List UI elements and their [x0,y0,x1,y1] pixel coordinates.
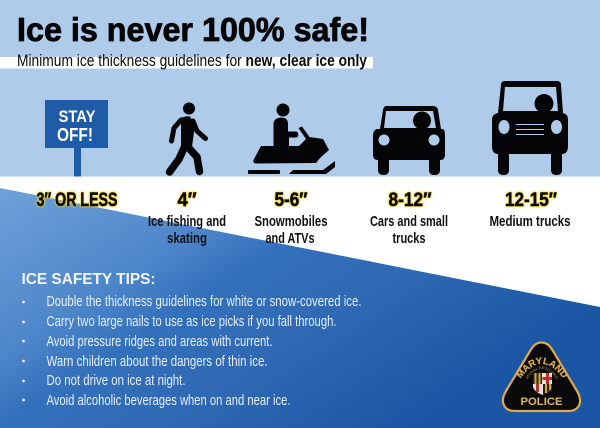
tip 2: Carry two large nails to use as ice picks if you fall through. [46,313,336,330]
tip 5: Do not drive on ice at night. [46,372,186,389]
tip 3: Avoid pressure ridges and areas with current. [46,333,272,350]
description: medium trucks: Medium trucks [490,213,570,230]
icon: stay off sign: STAY [58,108,96,126]
tip 1: Double the thickness guidelines for white or snow-covered ice. [46,293,362,310]
logo: Maryland Police badge: MARYLAND [517,357,566,378]
icon: car [373,106,445,175]
icon: stay off sign [45,100,108,176]
sky background panel [0,0,600,176]
description: cars: trucks [392,230,426,247]
subtitle banner: Minimum ice thickness guidelines for new, clear ice only [17,52,368,70]
thickness label: 5-6 inches: 5-6″ [274,189,308,211]
logo: Maryland Police badge: POLICE [520,396,562,408]
tip 4: Warn children about the dangers of thin ice. [46,353,268,370]
icon: stay off sign: OFF! [57,125,93,145]
description: cars [370,213,448,247]
thickness label: 3 inches or less: 3″ OR LESS [36,189,118,211]
logo: Maryland Police badge: NATURAL RESOURCES [526,366,558,380]
icon: snowmobile [248,104,335,174]
icon: medium truck [492,81,568,175]
title: Ice is never 100% safe! [17,11,369,48]
description: cars: Cars and small [370,213,448,230]
description: ice fishing: Ice fishing and [148,213,226,230]
tips heading: ICE SAFETY TIPS: [22,271,156,288]
tips list [22,293,361,409]
description: ice fishing: skating [167,230,207,247]
thickness label: 4 inches: 4″ [178,189,196,211]
description: snowmobiles: Snowmobiles [254,213,328,230]
thickness label: 8-12 inches: 8-12″ [388,189,432,211]
description: snowmobiles [254,213,328,247]
icon: walking person [170,102,206,172]
description: snowmobiles: and ATVs [266,230,314,247]
ice wedge panel [0,188,600,428]
description: ice fishing [148,213,226,247]
tip 6: Avoid alcoholic beverages when on and near ice. [46,392,290,409]
thickness label: 12-15 inches: 12-15″ [505,189,557,211]
